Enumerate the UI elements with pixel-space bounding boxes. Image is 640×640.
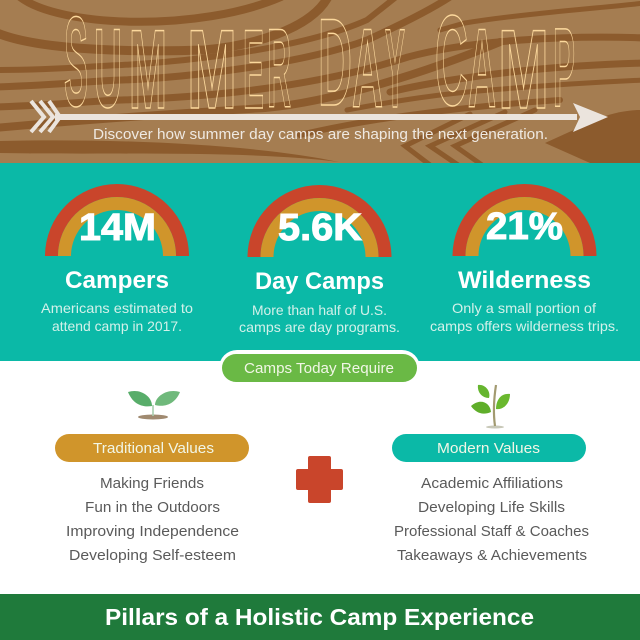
stat: campers: attend camp in 2017. <box>52 318 182 334</box>
panel: modern values: Takeaways & Achievements <box>397 547 587 564</box>
stat: wilderness: Wilderness <box>458 267 591 294</box>
stat: wilderness: camps offers wilderness trips. <box>430 318 619 334</box>
footer banner <box>0 594 640 640</box>
pill: camps today require <box>219 350 420 386</box>
stat: wilderness: 21% <box>486 206 563 248</box>
panel: traditional values <box>55 434 249 564</box>
panel: modern values <box>392 434 589 564</box>
panel: traditional values: Traditional Values <box>93 440 214 457</box>
arrow <box>31 101 608 132</box>
panel: wood header <box>0 0 640 165</box>
stat: wilderness: Only a small portion of <box>452 300 596 316</box>
panel: modern values: Academic Affiliations <box>421 475 563 492</box>
subtitle: Discover how summer day camps are shaping the next generation. <box>93 126 548 143</box>
stat: campers: Americans estimated to <box>41 300 193 316</box>
stat: campers <box>41 184 193 334</box>
title: M <box>498 7 549 132</box>
panel: traditional values: Fun in the Outdoors <box>85 499 220 516</box>
panel: modern values: Professional Staff & Coaches <box>394 523 589 540</box>
title: R <box>267 6 291 131</box>
title: M <box>187 7 237 132</box>
panel: teal statistics <box>0 163 640 361</box>
stat: day camps: Day Camps <box>255 268 384 295</box>
panel: modern values: Developing Life Skills <box>418 499 565 516</box>
panel: traditional values: Developing Self-esteem <box>69 547 236 564</box>
stat: day camps: camps are day programs. <box>239 319 400 335</box>
title: Y <box>385 6 405 131</box>
panel: traditional values: Improving Independence <box>66 523 239 540</box>
stat: campers: 14M <box>79 207 156 249</box>
text: P <box>553 5 575 130</box>
stat: wilderness <box>430 184 619 334</box>
title: A <box>352 6 383 131</box>
title <box>64 0 575 134</box>
footer banner: Pillars of a Holistic Camp Experience <box>105 604 534 630</box>
icon: plus cross <box>296 456 343 503</box>
pill: camps today require: Camps Today Require <box>244 360 394 377</box>
title: U <box>94 6 122 131</box>
panel: traditional values: Making Friends <box>100 475 204 492</box>
icon: young plant <box>471 385 510 428</box>
title: M <box>129 7 167 132</box>
panel: modern values: Modern Values <box>437 440 540 457</box>
stat: day camps <box>239 185 400 335</box>
stat: day camps: 5.6K <box>278 207 363 249</box>
stat: day camps: More than half of U.S. <box>252 302 387 318</box>
icon: sprout <box>128 391 180 420</box>
stat: campers: Campers <box>65 267 169 294</box>
title: A <box>468 6 496 131</box>
title: E <box>243 7 264 132</box>
